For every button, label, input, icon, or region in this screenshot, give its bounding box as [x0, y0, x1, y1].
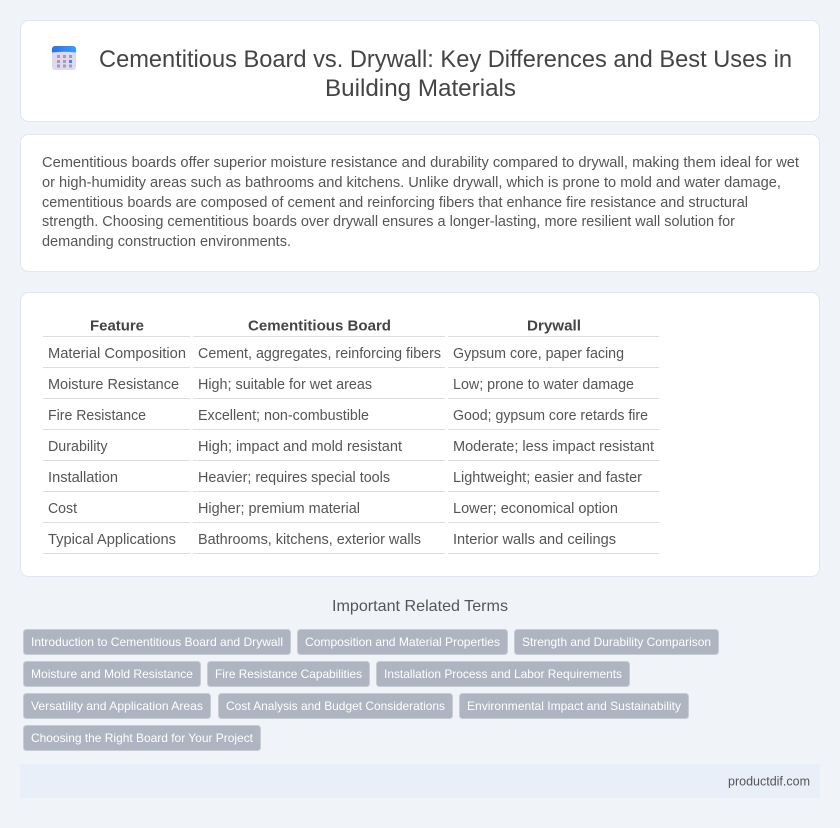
row: fire resistance	[48, 408, 648, 424]
row: moisture resistance: Moisture Resistance	[48, 377, 179, 393]
row: durability	[48, 439, 654, 455]
panel: title header	[20, 20, 820, 122]
row: typical applications	[48, 532, 616, 548]
tag	[24, 694, 210, 718]
tag	[208, 662, 370, 686]
title: Cementitious Board vs. Drywall: Key Differences and Best Uses in	[99, 46, 792, 73]
row: moisture resistance: Low; prone to water damage	[453, 377, 634, 393]
tag: Composition and Material Properties	[305, 635, 500, 649]
row: moisture resistance	[48, 377, 634, 393]
panel: introduction text: strength. Choosing cementitious boards over drywall ensures a longer-lasting, more resilient wall solution for	[42, 214, 735, 230]
row: material composition: Gypsum core, paper facing	[453, 346, 624, 362]
row: fire resistance: Fire Resistance	[48, 408, 146, 424]
row: typical applications: Typical Applications	[48, 532, 176, 548]
tag	[24, 726, 260, 750]
row: typical applications: Interior walls and ceilings	[453, 532, 616, 548]
row: fire resistance: Good; gypsum core retards fire	[453, 408, 648, 424]
tag: Strength and Durability Comparison	[522, 635, 711, 649]
row: cost: Higher; premium material	[198, 501, 360, 517]
row: fire resistance: Excellent; non-combustible	[198, 408, 369, 424]
row: installation: Installation	[48, 470, 118, 486]
tag: Fire Resistance Capabilities	[215, 667, 362, 681]
row: installation	[48, 470, 642, 486]
icon: calendar	[52, 46, 76, 70]
row: installation: Heavier; requires special tools	[198, 470, 390, 486]
footer	[20, 764, 820, 798]
tag: Installation Process and Labor Requirements	[384, 667, 622, 681]
footer: productdif.com	[728, 774, 810, 788]
row: durability: High; impact and mold resistant	[198, 439, 402, 455]
heading: important related terms: Important Related Terms	[332, 598, 508, 615]
panel: introduction text: demanding construction environments.	[42, 234, 291, 250]
tag	[376, 662, 630, 686]
tags: related terms	[24, 630, 718, 750]
row: material composition	[48, 346, 624, 362]
title	[99, 46, 792, 102]
tag	[24, 662, 200, 686]
tag	[460, 694, 688, 718]
tag: Moisture and Mold Resistance	[31, 667, 193, 681]
row: durability: Durability	[48, 439, 108, 455]
row: durability: Moderate; less impact resistant	[453, 439, 654, 455]
panel: introduction text: or high-humidity areas such as bathrooms and kitchens. Unlike drywall, which is prone to mold and water damage,	[42, 175, 781, 191]
row: installation: Lightweight; easier and faster	[453, 470, 642, 486]
row: material composition: Material Composition	[48, 346, 186, 362]
panel: introduction text: Cementitious boards offer superior moisture resistance and durability compared to drywall, making them ideal for wet	[42, 155, 799, 171]
tag	[298, 630, 508, 654]
panel: comparison table	[20, 292, 820, 576]
row: material composition: Cement, aggregates, reinforcing fibers	[198, 346, 441, 362]
tag: Versatility and Application Areas	[31, 699, 203, 713]
tag: Environmental Impact and Sustainability	[467, 699, 681, 713]
row: cost: Lower; economical option	[453, 501, 618, 517]
title: Building Materials	[325, 75, 516, 102]
tag	[24, 630, 290, 654]
row: cost	[48, 501, 618, 517]
row: moisture resistance: High; suitable for wet areas	[198, 377, 372, 393]
panel: introduction text: cementitious boards are composed of cement and reinforcing fibers that enhance fire resistance and structural	[42, 195, 748, 211]
table header: Feature	[90, 318, 144, 334]
tag: Cost Analysis and Budget Considerations	[226, 699, 445, 713]
tag: Choosing the Right Board for Your Project	[31, 731, 254, 745]
panel: introduction text	[20, 134, 820, 272]
row: typical applications: Bathrooms, kitchens, exterior walls	[198, 532, 421, 548]
tag: Introduction to Cementitious Board and Drywall	[31, 635, 283, 649]
table header: Cementitious Board	[248, 318, 391, 334]
tag	[218, 694, 452, 718]
row: cost: Cost	[48, 501, 77, 517]
table header	[90, 318, 581, 334]
table header: Drywall	[527, 318, 581, 334]
tag	[514, 630, 718, 654]
